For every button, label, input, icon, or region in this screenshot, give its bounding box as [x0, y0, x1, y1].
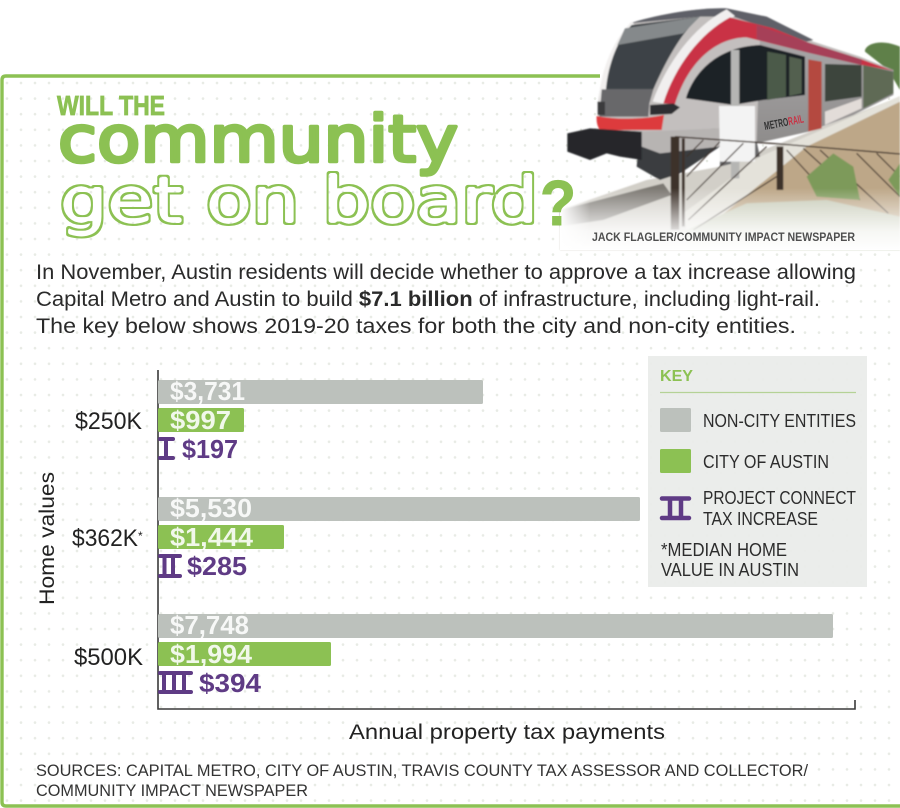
intro text: [36, 260, 856, 338]
row: $250K: $197: [182, 434, 238, 464]
photo: undercarriage: [637, 128, 720, 180]
photo: pole and sign: [731, 50, 739, 178]
key item: project connect tax increase: [662, 488, 856, 529]
left photo fade: [560, 200, 590, 250]
panel: key: [648, 356, 867, 587]
train photo: [560, 8, 900, 250]
train lettering: METRORAIL: [763, 114, 805, 133]
title line: will the: WILL THE: [57, 90, 165, 121]
key item: project connect tax increase: PROJECT CONNECT: [703, 488, 856, 508]
intro text: The key below shows 2019-20 taxes for both the city and non-city entities.: [36, 314, 796, 338]
photo: ground and track: [560, 97, 900, 250]
row: $250K: $250K: [75, 408, 142, 435]
key item: city of austin: [660, 449, 829, 473]
key note: VALUE IN AUSTIN: [661, 560, 799, 580]
title line: get on board: get on board: [60, 164, 538, 238]
photo: bushes: [807, 153, 860, 200]
row: $362K: $362K: [72, 525, 138, 552]
key item: non-city entities: NON-CITY ENTITIES: [703, 411, 856, 431]
photo: tree: [865, 43, 900, 90]
row: $250K: $3,731: [170, 376, 245, 406]
title: [57, 90, 576, 239]
photo: side windows: [686, 45, 805, 105]
x axis title: Annual property tax payments: [349, 720, 665, 744]
photo: windshield: [606, 17, 700, 89]
photo: fence: [675, 137, 900, 230]
photo credit: JACK FLAGLER/COMMUNITY IMPACT NEWSPAPER: [592, 231, 856, 244]
row: $500K: $394: [199, 668, 262, 698]
photo: white nose edge: [599, 22, 635, 102]
intro text: Capital Metro and Austin to build $7.1 billion of infrastructure, including light-rail.: [36, 287, 820, 311]
key item: non-city entities: [660, 408, 856, 432]
sources: SOURCES: CAPITAL METRO, CITY OF AUSTIN, TRAVIS COUNTY TAX ASSESSOR AND COLLECTOR/: [36, 761, 808, 780]
key item: project connect tax increase: TAX INCREASE: [703, 509, 818, 529]
row: $500K: $500K: [74, 644, 143, 671]
photo: white and red stripes: [653, 9, 735, 103]
photo: train body: [598, 8, 893, 157]
title line: community: community: [58, 104, 458, 178]
sources: [36, 761, 808, 800]
row: $362K: *: [138, 529, 143, 543]
key note: *MEDIAN HOME: [661, 540, 787, 560]
axes: [158, 370, 855, 709]
row: $500K: $1,994: [170, 639, 253, 669]
row: $500K: $7,748: [170, 610, 249, 640]
row: $250K: $997: [170, 405, 231, 435]
y axis title: Home values: [36, 472, 59, 605]
row: $362K: $5,530: [170, 493, 252, 523]
bar chart: [36, 370, 855, 744]
row: $362K: $285: [187, 551, 247, 581]
intro text: In November, Austin residents will decide whether to approve a tax increase allowing: [36, 260, 856, 284]
row: $362K: [72, 493, 640, 581]
key item: city of austin: CITY OF AUSTIN: [703, 452, 829, 472]
row: $362K: $1,444: [170, 522, 254, 552]
key note: [661, 540, 799, 580]
sources: COMMUNITY IMPACT NEWSPAPER: [36, 781, 308, 800]
row: $500K: [74, 610, 833, 698]
key heading: KEY: [660, 368, 693, 385]
photo: nose and skirt: [599, 89, 653, 117]
row: $250K: [75, 376, 483, 464]
photo fade: [560, 188, 900, 250]
title question mark: ?: [540, 167, 576, 239]
